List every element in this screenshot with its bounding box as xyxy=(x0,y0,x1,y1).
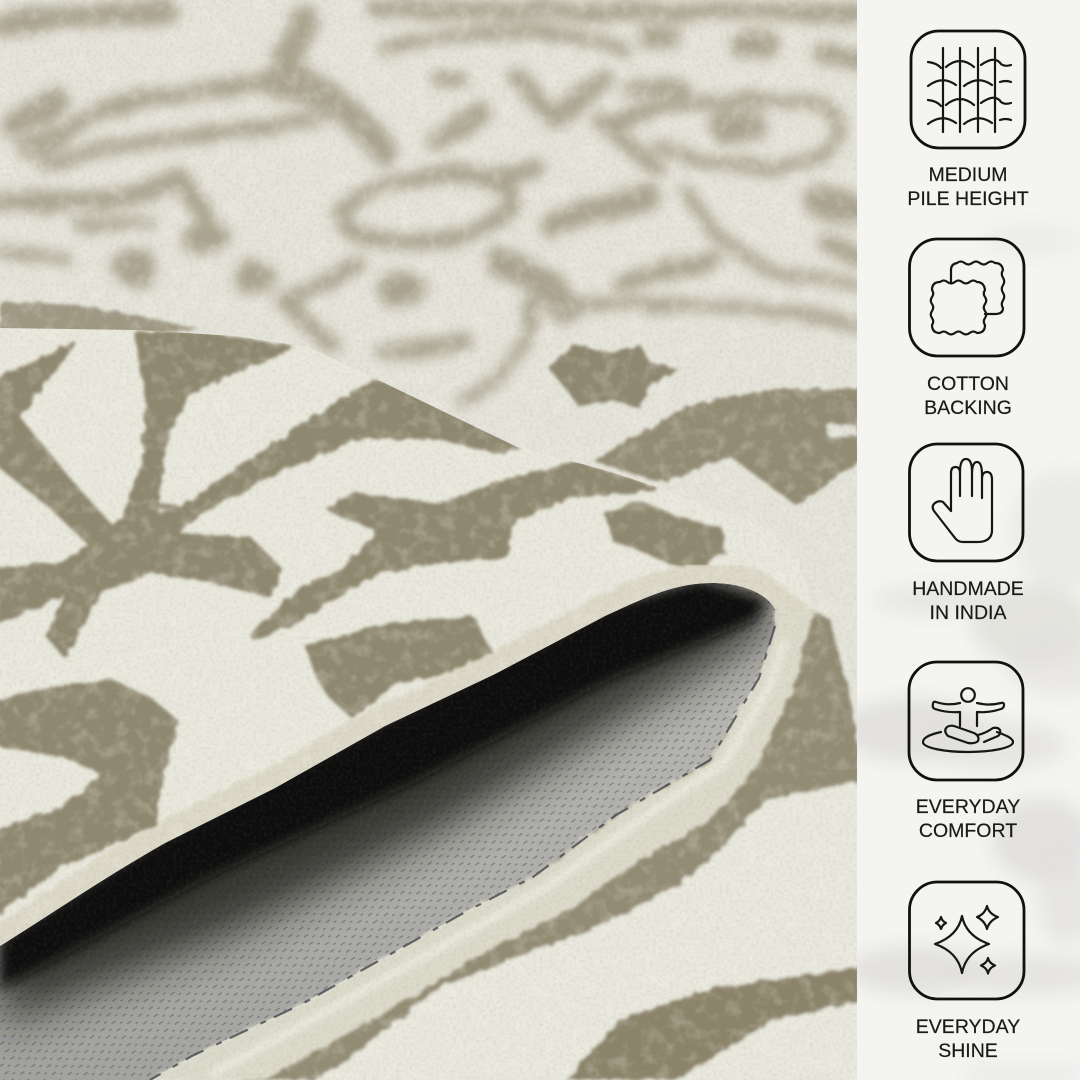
wool texture xyxy=(0,0,857,1080)
label: everyday shine: SHINE xyxy=(938,1040,998,1062)
feature: handmade in india xyxy=(908,442,1024,624)
label: cotton backing: COTTON xyxy=(927,373,1009,395)
rug underside and shadow xyxy=(0,575,775,1080)
icon: sparkles xyxy=(908,880,1026,1000)
feature: everyday shine xyxy=(908,880,1026,1062)
label: everyday comfort: EVERYDAY xyxy=(916,796,1020,818)
label: everyday shine: EVERYDAY xyxy=(916,1016,1020,1038)
label: handmade in india: IN INDIA xyxy=(930,602,1006,624)
label: medium pile height: PILE HEIGHT xyxy=(907,188,1029,210)
label: medium pile height xyxy=(907,164,1029,210)
icon: cotton swatches xyxy=(908,238,1026,358)
label: medium pile height: MEDIUM xyxy=(928,164,1008,186)
feature: medium pile height xyxy=(907,30,1029,972)
feature: everyday comfort xyxy=(908,660,1024,842)
feature: cotton backing xyxy=(908,238,1026,419)
panel: product features xyxy=(857,0,1080,1080)
icon: woven pile xyxy=(908,30,1026,906)
rug background, out of focus xyxy=(0,0,860,1080)
icon: hand xyxy=(908,442,1024,562)
rug pile face with pattern xyxy=(0,328,814,946)
label: everyday comfort xyxy=(916,796,1020,842)
label: cotton backing xyxy=(924,373,1012,419)
label: everyday comfort: COMFORT xyxy=(919,820,1017,842)
label: handmade in india: HANDMADE xyxy=(912,578,1024,600)
label: handmade in india xyxy=(912,578,1024,624)
photo: folded rug close-up xyxy=(0,0,857,1080)
label: everyday shine xyxy=(916,1016,1020,1062)
label: cotton backing: BACKING xyxy=(924,397,1012,419)
rolled edge of the rug with seam xyxy=(150,605,814,1080)
icon: seated meditation xyxy=(908,660,1024,782)
